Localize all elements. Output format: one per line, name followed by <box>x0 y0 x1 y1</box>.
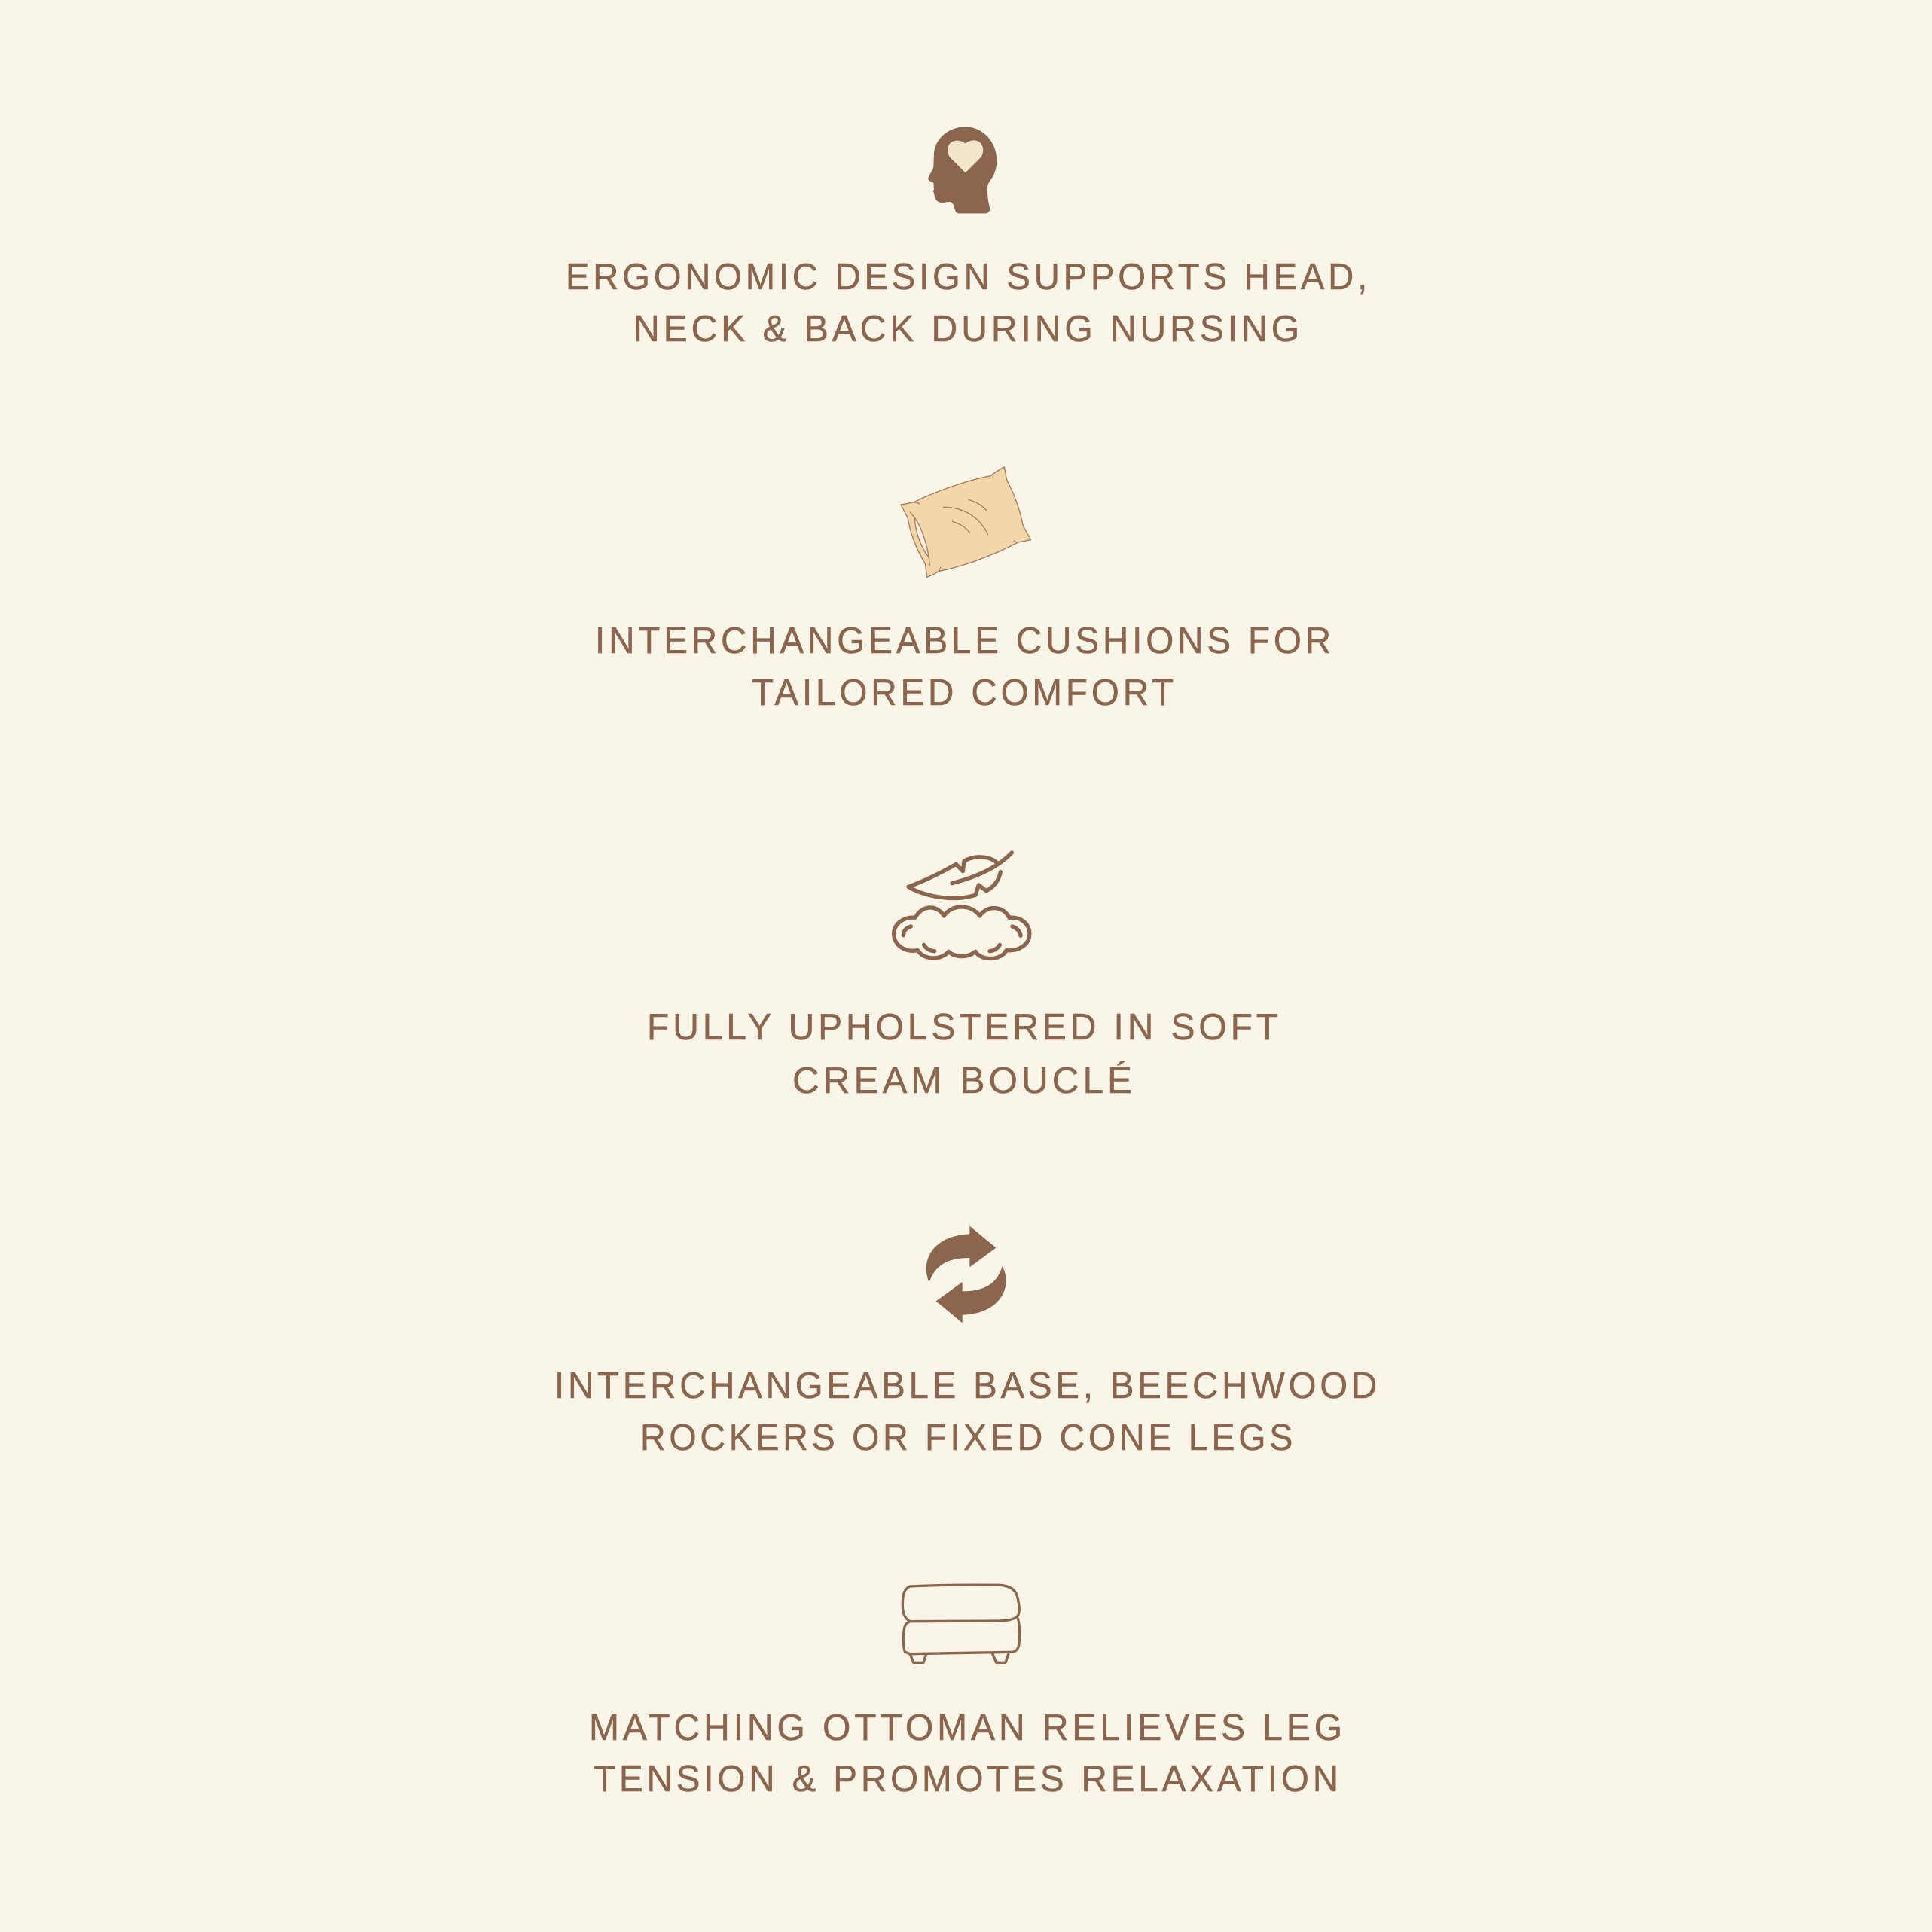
text: interchangeable base <box>554 1366 1381 1458</box>
text: matching ottoman <box>589 1708 1346 1799</box>
icon: feather and cloud <box>894 853 1030 959</box>
text: interchangeable base: INTERCHANGEABLE BASE, BEECHWOOD <box>554 1366 1381 1406</box>
text: ergonomic design: NECK & BACK DURING NURSING <box>633 309 1303 349</box>
text: ergonomic design: ERGONOMIC DESIGN SUPPORTS HEAD, <box>566 257 1371 298</box>
icon: pillow <box>901 467 1031 577</box>
text: matching ottoman: TENSION & PROMOTES RELAXATION <box>594 1759 1342 1799</box>
text: ergonomic design <box>566 257 1371 349</box>
text: matching ottoman: MATCHING OTTOMAN RELIEVES LEG <box>589 1708 1346 1748</box>
icon: swap arrows <box>926 1226 1006 1323</box>
icon: ottoman <box>902 1585 1020 1662</box>
text: interchangeable cushions: TAILORED COMFORT <box>752 673 1177 713</box>
text: fully upholstered <box>647 1007 1282 1101</box>
text: interchangeable cushions <box>595 621 1335 713</box>
text: fully upholstered: FULLY UPHOLSTERED IN SOFT <box>647 1007 1282 1048</box>
text: fully upholstered: CREAM BOUCLÉ <box>792 1061 1136 1101</box>
text: interchangeable cushions: INTERCHANGEABLE CUSHIONS FOR <box>595 621 1335 661</box>
icon: head with heart <box>928 127 997 213</box>
text: interchangeable base: ROCKERS OR FIXED CONE LEGS <box>640 1418 1296 1458</box>
